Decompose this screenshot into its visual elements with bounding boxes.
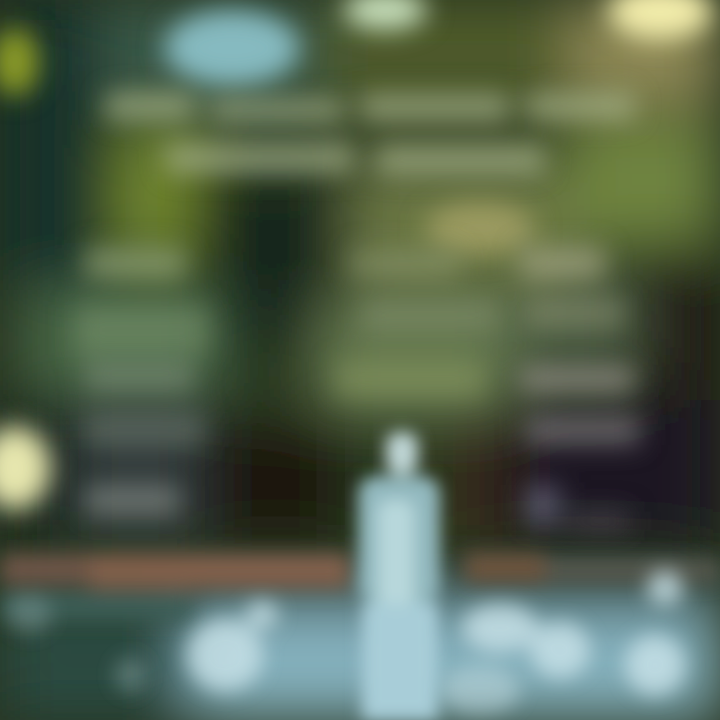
sunlight glow xyxy=(425,0,712,254)
left column text blur xyxy=(75,248,210,514)
right column text blur xyxy=(335,248,640,532)
shoreline band xyxy=(0,554,720,620)
water highlights xyxy=(8,570,685,714)
water bottle xyxy=(358,432,440,720)
title text blur xyxy=(105,92,635,175)
light bokeh blobs xyxy=(0,0,427,510)
